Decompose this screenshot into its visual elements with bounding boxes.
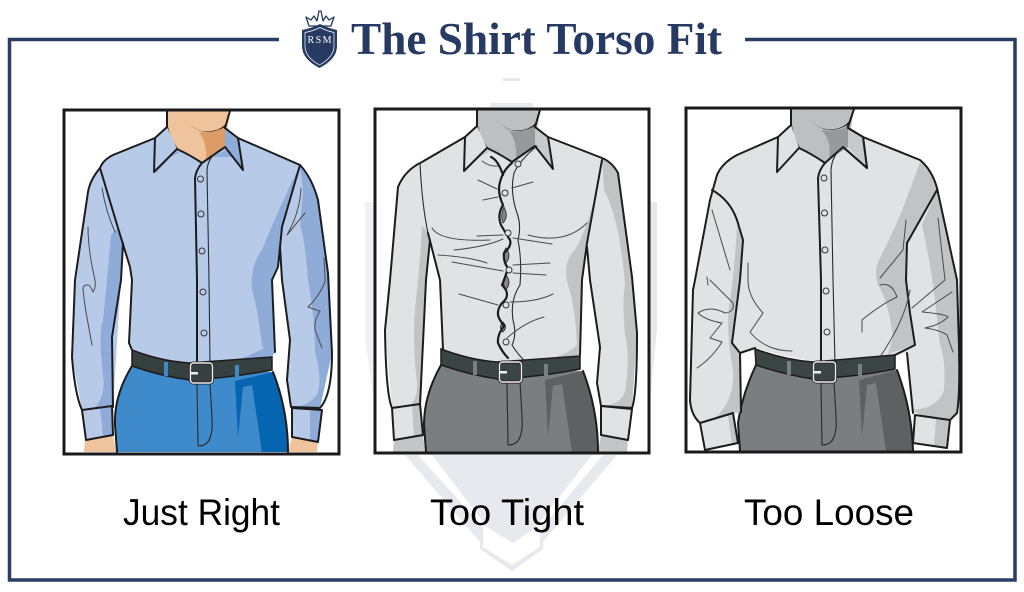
- panel: just right: [64, 110, 339, 454]
- buttons: [198, 176, 207, 336]
- label: too tight: Too Tight: [430, 492, 585, 533]
- neck and hands: [84, 111, 318, 452]
- pants: [424, 365, 598, 452]
- collar: [777, 125, 867, 172]
- pants: [115, 366, 288, 452]
- cuffs: [392, 404, 632, 440]
- buttons: [821, 175, 830, 335]
- collar: [154, 127, 243, 172]
- belt: [132, 350, 272, 383]
- label: too loose: Too Loose: [744, 492, 914, 533]
- belt: [441, 349, 580, 382]
- logo shield: [302, 24, 337, 68]
- title: The Shirt Torso Fit: [351, 14, 722, 64]
- cuffs: [82, 406, 322, 442]
- placket: [195, 163, 202, 362]
- collar: [464, 126, 553, 171]
- cuffs: [700, 413, 950, 450]
- panel: too tight: [375, 109, 649, 453]
- neck and hands: [393, 110, 628, 452]
- logo crown: [306, 11, 334, 26]
- wrinkles: [83, 188, 325, 348]
- belt: [755, 349, 895, 382]
- neck: [791, 109, 854, 163]
- picture frame: [64, 110, 339, 454]
- shirt body: [72, 127, 332, 410]
- label: just right: Just Right: [123, 492, 281, 533]
- watermark shield: [365, 78, 657, 571]
- gap openings: [500, 207, 509, 332]
- wrinkles: [432, 161, 587, 338]
- picture frame: [686, 108, 961, 452]
- buttons: [502, 161, 521, 345]
- logo monogram: RSM: [308, 35, 332, 46]
- panel: too loose: [686, 108, 961, 452]
- wrinkles: [697, 210, 953, 368]
- placket: [818, 163, 825, 361]
- shirt body: [385, 126, 637, 408]
- shirt body: [690, 125, 959, 423]
- picture frame: [375, 109, 649, 453]
- pants: [738, 365, 913, 451]
- logo crest: [302, 11, 337, 68]
- wavy placket: [491, 157, 512, 358]
